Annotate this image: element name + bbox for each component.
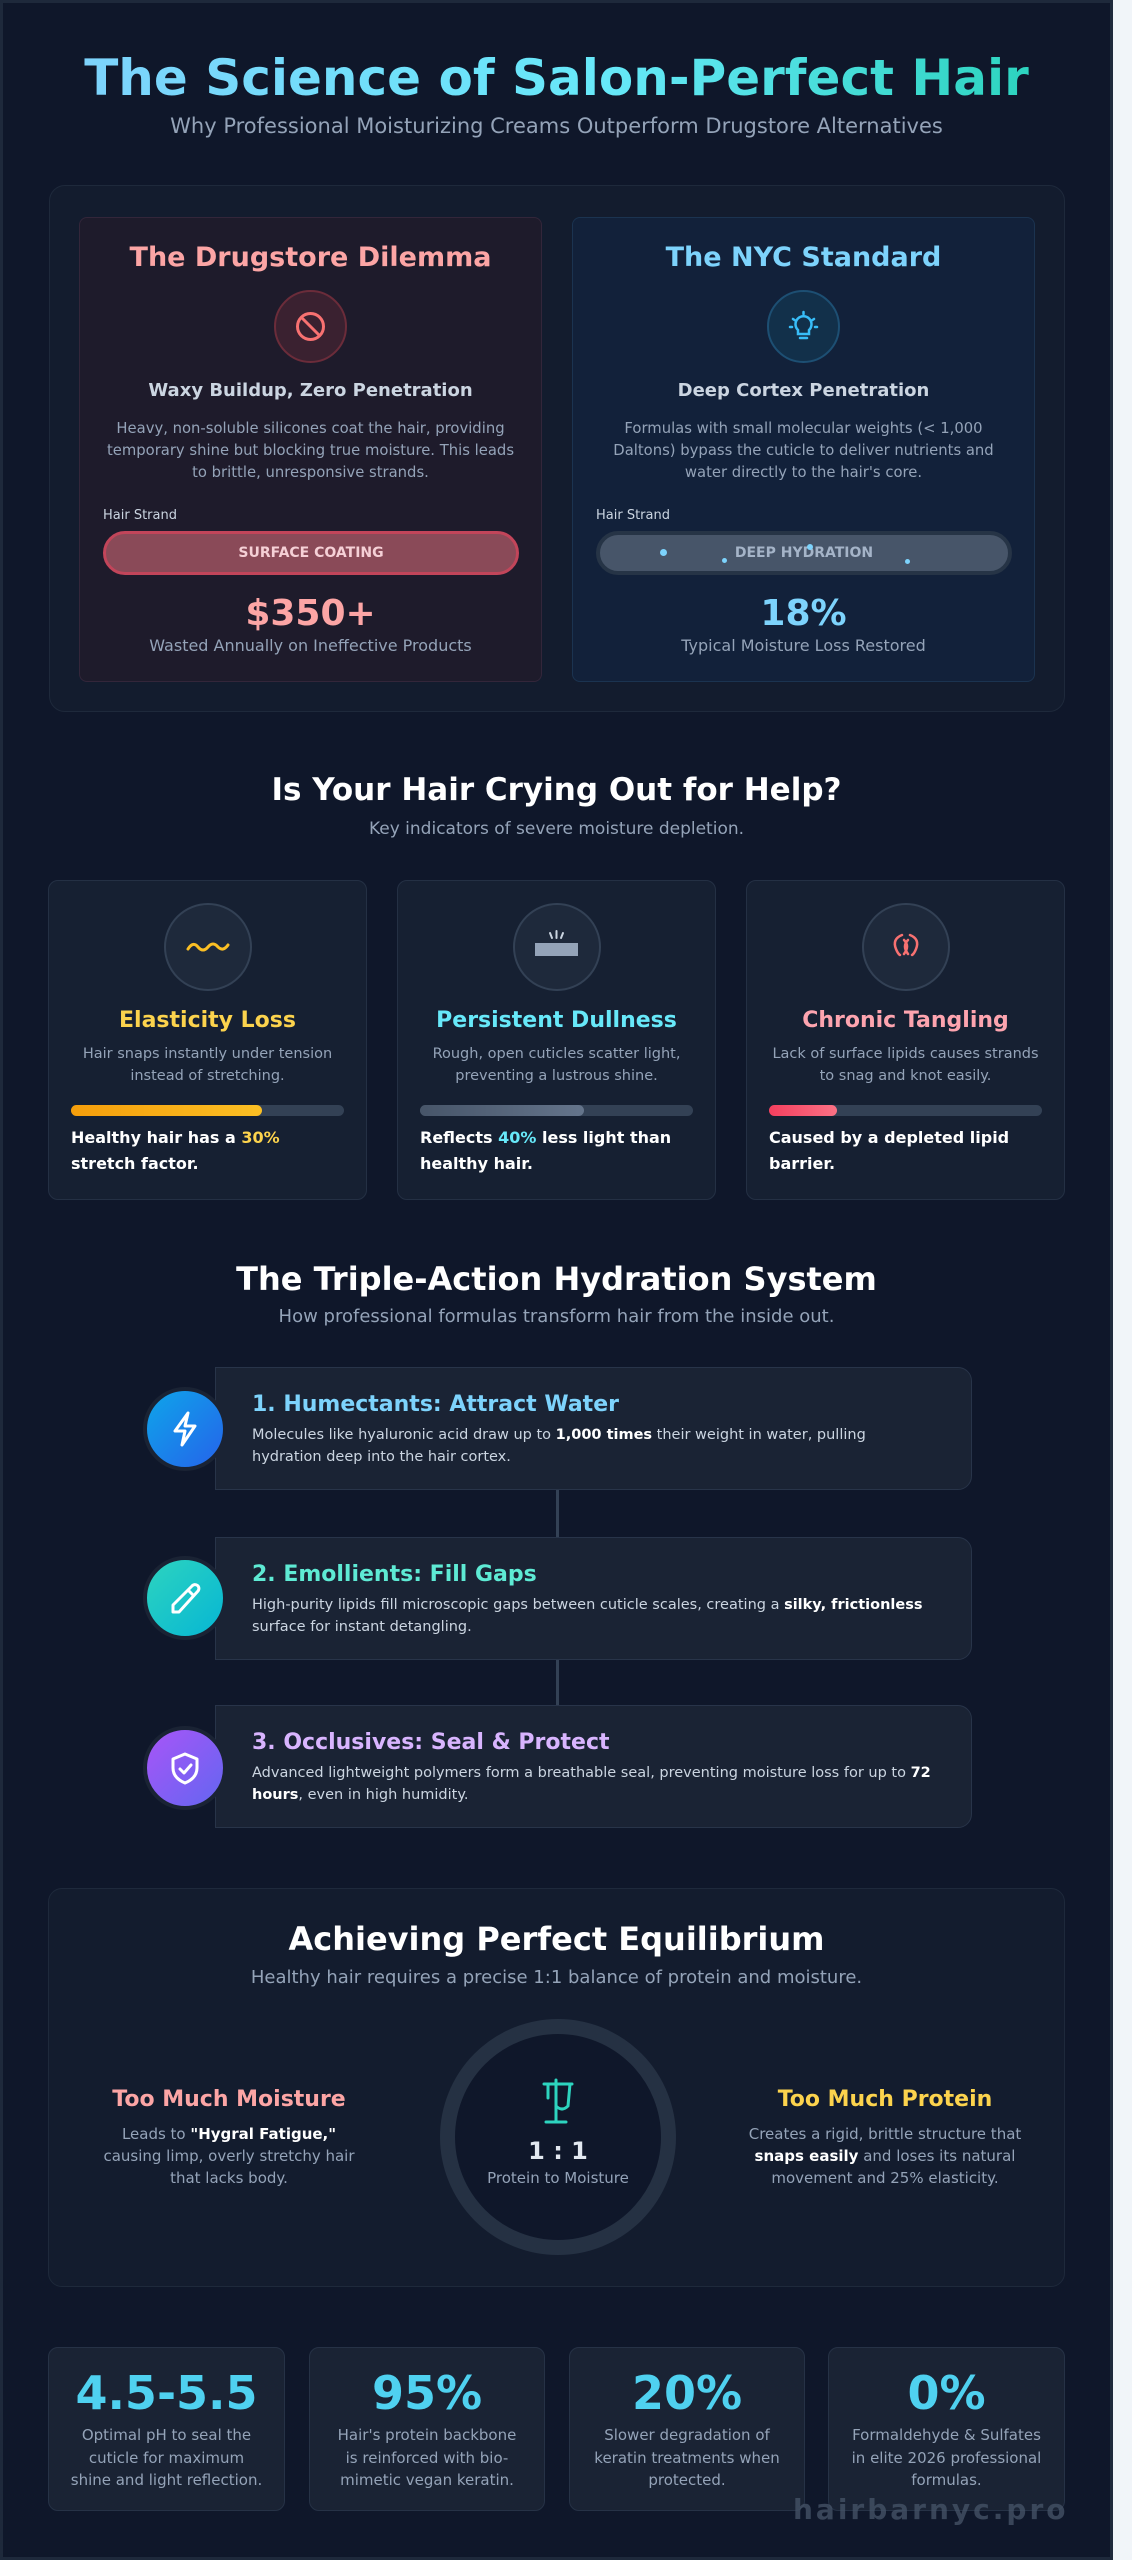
card: elasticity loss bbox=[48, 880, 367, 1200]
stat: pH: shine and light reflection. bbox=[71, 2471, 262, 2489]
subtitle: Why Professional Moisturizing Creams Outperform Drugstore Alternatives bbox=[170, 114, 943, 138]
stat: pH: 4.5-5.5 bbox=[75, 2366, 258, 2420]
panel: comparison bbox=[49, 185, 1065, 712]
bar: surface coating: SURFACE COATING bbox=[238, 545, 384, 561]
stat: 95%: 95% bbox=[372, 2366, 482, 2420]
stat: pH: Optimal pH to seal the bbox=[82, 2426, 251, 2444]
body: High-purity lipids fill microscopic gaps between cuticle scales, creating a silky, frictionless surface for instant detangling. bbox=[252, 1597, 922, 1635]
left: too much moisture: Leads to "Hygral Fatigue," causing limp, overly stretchy hair that lacks body. bbox=[103, 2125, 355, 2187]
bar: deep hydration bbox=[596, 531, 1012, 575]
stat text: Caused by a depleted lipid barrier. bbox=[769, 1128, 1009, 1173]
left: too much moisture: Too Much Moisture bbox=[112, 2087, 346, 2112]
stat: 0%: Formaldehyde & Sulfates in elite 2026 professional formulas. bbox=[852, 2426, 1041, 2489]
stat: 20%: Slower degradation of keratin treatments when protected. bbox=[594, 2426, 780, 2489]
step 2: emollients bbox=[215, 1537, 972, 1660]
stat: 20% bbox=[569, 2347, 805, 2511]
bar bbox=[769, 1105, 1042, 1116]
heading: triple-action: The Triple-Action Hydration System bbox=[236, 1260, 877, 1298]
stat: pH: cuticle for maximum bbox=[89, 2448, 244, 2466]
description: Lack of surface lipids causes strands to snag and knot easily. bbox=[772, 1046, 1039, 1084]
heading: Achieving Perfect Equilibrium bbox=[288, 1920, 825, 1958]
stat: 95% bbox=[309, 2347, 545, 2511]
icon: wave bbox=[164, 903, 252, 991]
title: 2. Emollients: Fill Gaps bbox=[252, 1562, 537, 1587]
title: Persistent Dullness bbox=[436, 1008, 677, 1033]
stat text: Reflects 40% less light than healthy hair. bbox=[420, 1128, 671, 1173]
description: Rough, open cuticles scatter light, preventing a lustrous shine. bbox=[433, 1046, 680, 1084]
step 1: humectants bbox=[215, 1367, 972, 1490]
bar bbox=[71, 1105, 344, 1116]
icon: prohibited bbox=[274, 290, 347, 363]
card: chronic tangling bbox=[746, 880, 1065, 1200]
icon: dull surface bbox=[513, 903, 601, 991]
icon: lightning bbox=[143, 1387, 227, 1471]
icon: shield bbox=[143, 1726, 227, 1810]
card: NYC standard bbox=[572, 217, 1035, 682]
connector lines bbox=[556, 1490, 559, 1537]
body text: to brittle, unresponsive strands. bbox=[192, 464, 429, 481]
title: The Science of Salon-Perfect Hair bbox=[84, 49, 1029, 107]
icon: pencil bbox=[143, 1556, 227, 1640]
body text bbox=[107, 420, 514, 481]
card: persistent dullness bbox=[397, 880, 716, 1200]
stat: pH bbox=[48, 2347, 285, 2511]
heading: drugstore: The Drugstore Dilemma bbox=[130, 242, 491, 273]
title: Chronic Tangling bbox=[802, 1008, 1009, 1033]
subheading: Key indicators of severe moisture depletion. bbox=[369, 819, 744, 839]
subheading: How professional formulas transform hair from the inside out. bbox=[279, 1306, 834, 1327]
icon: scale bbox=[542, 2078, 574, 2124]
stat: 0% bbox=[828, 2347, 1065, 2511]
stat: 0%: 0% bbox=[907, 2366, 986, 2420]
body text: temporary shine but blocking true moisture. This leads bbox=[107, 442, 514, 459]
body text: Formulas with small molecular weights (< 1,000 bbox=[624, 420, 983, 437]
bar bbox=[420, 1105, 693, 1116]
subheading: Deep Cortex Penetration bbox=[678, 380, 929, 401]
ratio label: Protein to Moisture bbox=[487, 2169, 629, 2187]
subheading: Waxy Buildup, Zero Penetration bbox=[148, 380, 473, 401]
label: hair strand: Hair Strand bbox=[103, 508, 177, 523]
ratio circle bbox=[440, 2019, 676, 2255]
caption: Typical Moisture Loss Restored bbox=[681, 636, 926, 655]
label: hair strand: Hair Strand bbox=[596, 508, 670, 523]
body text: Heavy, non-soluble silicones coat the hair, providing bbox=[116, 420, 505, 437]
body text bbox=[613, 420, 994, 481]
icon: lightbulb bbox=[767, 290, 840, 363]
heading: is your hair crying: Is Your Hair Crying Out for Help? bbox=[272, 772, 842, 808]
stat text: Healthy hair has a 30% stretch factor. bbox=[71, 1128, 280, 1173]
panel: equilibrium bbox=[48, 1888, 1065, 2287]
right: too much protein: Too Much Protein bbox=[778, 2087, 992, 2112]
right: too much protein bbox=[749, 2087, 1021, 2187]
body: Molecules like hyaluronic acid draw up to 1,000 times their weight in water, pulling hydration deep into the hair cortex. bbox=[252, 1427, 866, 1465]
stat: 95%: Hair's protein backbone is reinforced with bio-mimetic vegan keratin. bbox=[338, 2426, 516, 2489]
heading: NYC: The NYC Standard bbox=[666, 242, 941, 273]
stat: 20%: 20% bbox=[632, 2366, 742, 2420]
body text: Daltons) bypass the cuticle to deliver nutrients and bbox=[613, 442, 994, 459]
stat: 18%: 18% bbox=[760, 593, 847, 634]
bar: deep hydration: DEEP HYDRATION bbox=[735, 545, 873, 561]
description: Hair snaps instantly under tension instead of stretching. bbox=[83, 1046, 332, 1084]
watermark: hairbarnyc.pro bbox=[793, 2493, 1068, 2526]
body text: water directly to the hair's core. bbox=[685, 464, 922, 481]
title: 1. Humectants: Attract Water bbox=[252, 1392, 619, 1417]
card: drugstore dilemma bbox=[79, 217, 542, 682]
caption: Wasted Annually on Ineffective Products bbox=[149, 636, 472, 655]
body: Advanced lightweight polymers form a breathable seal, preventing moisture loss for up to 72 hours, even in high humidity. bbox=[252, 1765, 931, 1803]
step 3: occlusives bbox=[215, 1705, 972, 1828]
subheading: Healthy hair requires a precise 1:1 balance of protein and moisture. bbox=[251, 1967, 862, 1988]
left: too much moisture bbox=[103, 2087, 355, 2187]
stat: $350+: $350+ bbox=[245, 593, 376, 634]
right: too much protein: Creates a rigid, brittle structure that snaps easily and loses its natural movement and 25% elasticity. bbox=[749, 2125, 1021, 2187]
icon: tangle bbox=[862, 903, 950, 991]
ratio text: 1 : 1 bbox=[528, 2137, 588, 2165]
title: Elasticity Loss bbox=[119, 1008, 296, 1033]
title: 3. Occlusives: Seal & Protect bbox=[252, 1730, 610, 1755]
bar: surface coating bbox=[103, 531, 519, 575]
